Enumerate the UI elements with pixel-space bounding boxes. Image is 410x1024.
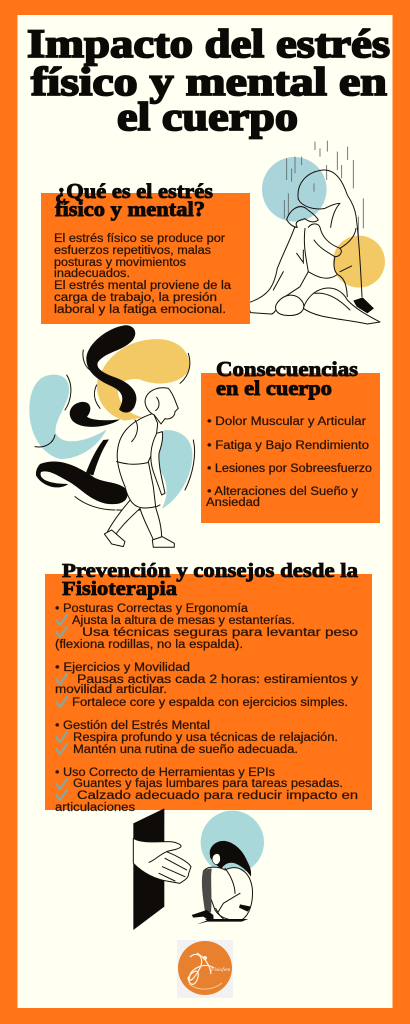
panel: prevention	[45, 560, 372, 814]
title	[27, 21, 390, 139]
list of consequences	[206, 416, 372, 509]
heading: Consecuencias	[216, 357, 358, 381]
tips: tools	[55, 767, 358, 814]
tips: posture	[55, 603, 358, 651]
body text: El estrés físico se produce por	[54, 233, 225, 245]
panel background	[41, 193, 250, 324]
panel background	[201, 373, 380, 523]
list of consequences: • Dolor Muscular y Articular	[207, 416, 366, 428]
heading: en el cuerpo	[216, 376, 332, 400]
tips: exercise: Pausas activas cada 2 horas: estiramientos y	[77, 674, 358, 686]
crouching woman	[192, 841, 252, 924]
body text: posturas y movimientos	[54, 257, 186, 269]
title: Impacto del estrés	[27, 21, 390, 66]
list of consequences: • Alteraciones del Sueño y	[207, 486, 358, 498]
panel background	[45, 574, 372, 810]
logo	[177, 940, 233, 998]
heading: Fisioterapia	[62, 578, 177, 600]
tips: exercise: • Ejercicios y Movilidad	[55, 662, 190, 674]
tips: tools: Calzado adecuado para reducir impacto en	[77, 790, 358, 802]
body text: esfuerzos repetitivos, malas	[54, 245, 211, 257]
panel: consequences	[201, 357, 380, 523]
tips: mental stress: Respira profundo y usa técnicas de relajación.	[73, 732, 338, 744]
heading: ¿Qué es el estrés	[55, 179, 213, 203]
tips: exercise: movilidad articular.	[55, 684, 167, 696]
list of consequences: • Fatiga y Bajo Rendimiento	[207, 440, 369, 452]
illustration: walking person with swirls	[29, 325, 195, 547]
heading	[216, 357, 358, 400]
blue circle	[201, 811, 264, 874]
tips: posture: (flexiona rodillas, no la espalda).	[55, 639, 243, 651]
body text	[54, 233, 232, 316]
heading: Prevención y consejos desde la	[62, 560, 358, 582]
illustration: hand reaching to crouching woman	[133, 808, 264, 930]
tips: exercise	[55, 662, 358, 709]
logo: Fisiofem	[210, 966, 230, 973]
body text: laboral y la fatiga emocional.	[54, 304, 226, 316]
icon: black doorway	[133, 808, 164, 930]
illustration: crying woman in the rain	[247, 141, 385, 324]
tips: exercise: Fortalece core y espalda con ejercicios simples.	[72, 697, 348, 709]
body text: inadecuados.	[54, 268, 130, 280]
tips: posture: • Posturas Correctas y Ergonomía	[55, 603, 249, 615]
heading: físico y mental?	[55, 197, 205, 221]
tips: mental stress: • Gestión del Estrés Mental	[55, 720, 210, 732]
tips: tools: Guantes y fajas lumbares para tareas pesadas.	[73, 778, 343, 790]
tips: posture: Usa técnicas seguras para levantar peso	[82, 627, 358, 639]
tips: tools: articulaciones	[55, 802, 135, 814]
title: el cuerpo	[117, 94, 298, 139]
body text: El estrés mental proviene de la	[54, 280, 232, 292]
heading	[62, 560, 358, 600]
tips: tools: • Uso Correcto de Herramientas y EPIs	[55, 767, 275, 779]
heading	[55, 179, 213, 221]
panel: what is stress	[41, 179, 250, 324]
tips: mental stress	[55, 720, 338, 756]
tips: posture: Ajusta la altura de mesas y estanterías.	[72, 615, 295, 627]
list of consequences: Ansiedad	[206, 497, 260, 509]
icon: helping hand	[133, 838, 191, 883]
list of consequences: • Lesiones por Sobreesfuerzo	[207, 463, 372, 475]
tips: mental stress: Mantén una rutina de sueño adecuada.	[73, 744, 298, 756]
title: físico y mental en	[31, 59, 387, 104]
body text: carga de trabajo, la presión	[54, 292, 217, 304]
